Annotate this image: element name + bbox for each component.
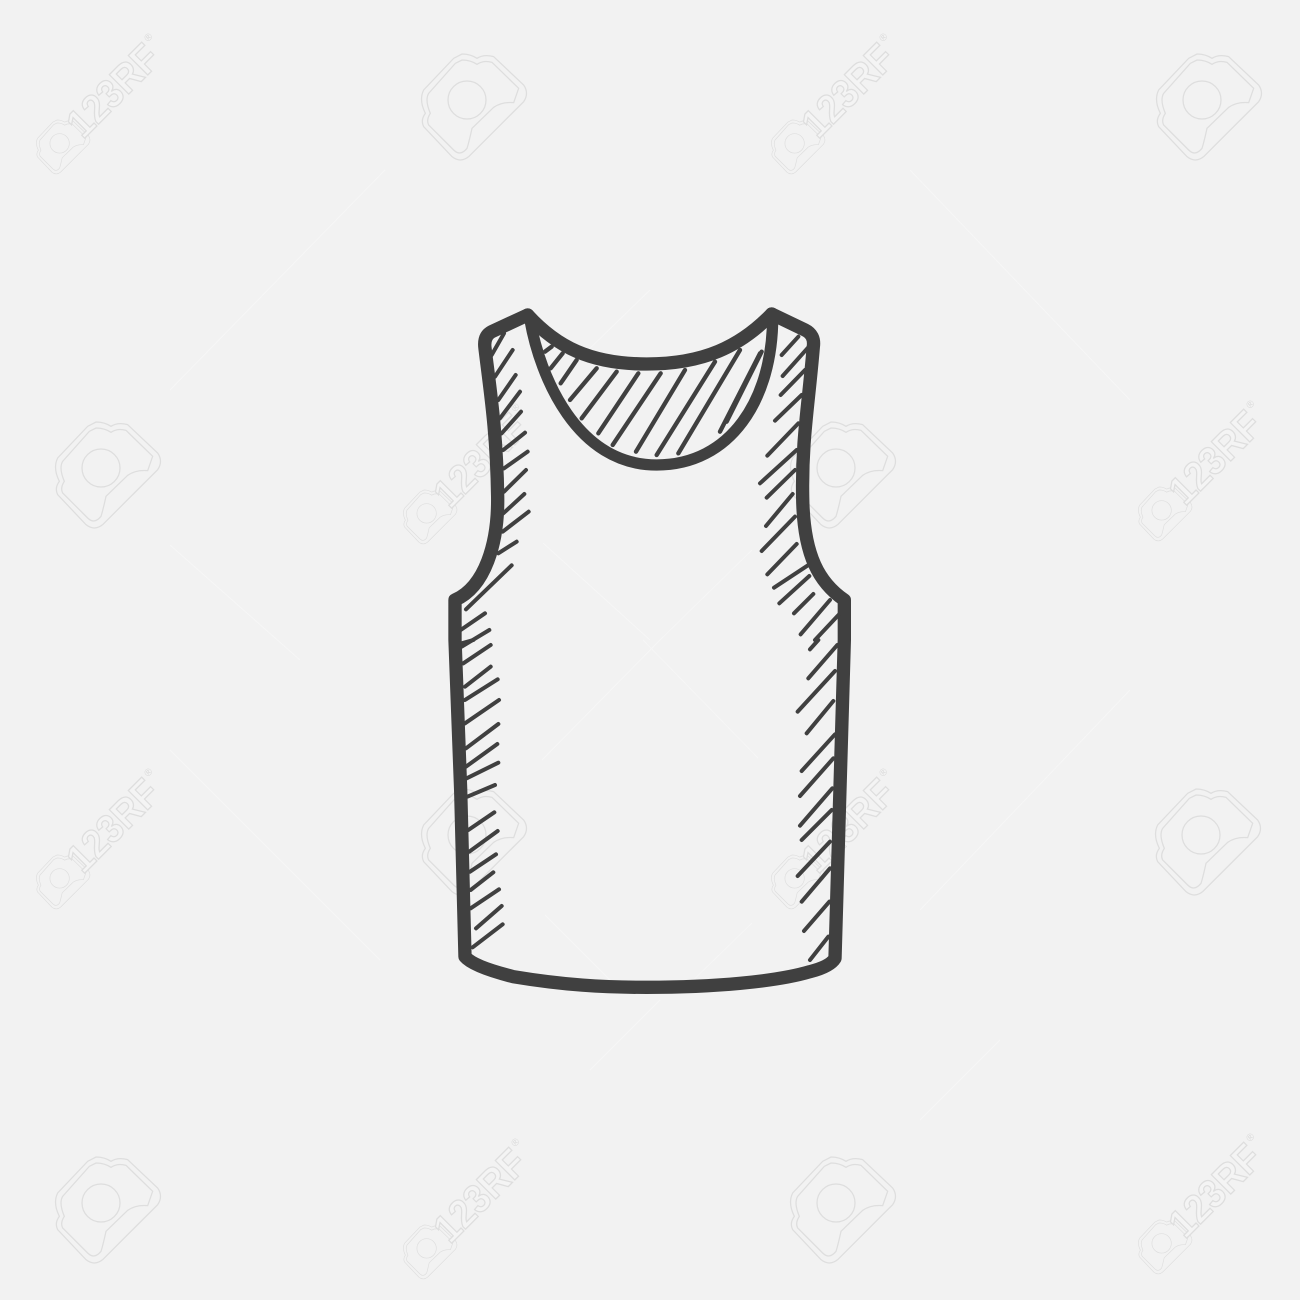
watermark: 123RF top left: ® (142, 31, 156, 44)
back neckline (528, 314, 772, 364)
watermark: egg bottom right (791, 1157, 895, 1263)
watermark: 123RF bottom center: 123RF (425, 1141, 536, 1251)
faint watermark grid lines (170, 170, 1130, 1120)
watermark: 123RF bottom far right: 123RF (1160, 1136, 1271, 1246)
watermark: 123RF row 2 far right: ® (1244, 398, 1258, 411)
watermark: egg row 2 right (791, 422, 895, 528)
watermark: 123RF top left: 123RF (58, 36, 169, 146)
watermark: 123RF bottom center: ® (509, 1136, 523, 1149)
watermark: egg bottom left (56, 1157, 160, 1263)
watermark: 123RF top right: 123RF (793, 36, 904, 146)
tank top outline (455, 314, 844, 987)
right hatching (760, 337, 840, 960)
watermark: 123RF row 2 far right: 123RF (1160, 403, 1271, 513)
icon: tank top sketch (455, 314, 844, 987)
watermark: 123RF row 2 center: 123RF (425, 406, 536, 516)
neck hatching (545, 347, 762, 455)
front neckline (530, 315, 773, 465)
watermark: 123RF row 3 left: ® (142, 766, 156, 779)
watermark: 123RF top right: ® (877, 31, 891, 44)
watermark: 123RF bottom far right: ® (1244, 1131, 1258, 1144)
watermark: 123RF bottom far right (1111, 1120, 1293, 1300)
watermark: egg row 3 far right (1156, 789, 1260, 895)
watermark: 123RF row 2 far right (1111, 387, 1293, 568)
watermark: 123RF top left (9, 20, 191, 201)
watermark: 123RF row 3 right: 123RF (793, 771, 904, 881)
watermark: 123RF row 3 right: ® (877, 766, 891, 779)
watermark: egg row 3 center (422, 789, 526, 895)
watermark: egg far right (1157, 54, 1261, 160)
watermark: 123RF bottom center (376, 1125, 558, 1300)
watermark: 123RF row 3 right (744, 755, 926, 936)
watermark: 123RF row 2 center (376, 390, 558, 571)
watermark: 123RF top right (744, 20, 926, 201)
watermark: 123RF row 3 left: 123RF (58, 771, 169, 881)
watermark: 123RF row 2 center: ® (509, 401, 523, 414)
watermark: egg top (422, 54, 526, 160)
watermark: 123RF row 3 left (9, 755, 191, 936)
watermark: egg row 2 left (56, 422, 160, 528)
left hatching (461, 333, 529, 947)
